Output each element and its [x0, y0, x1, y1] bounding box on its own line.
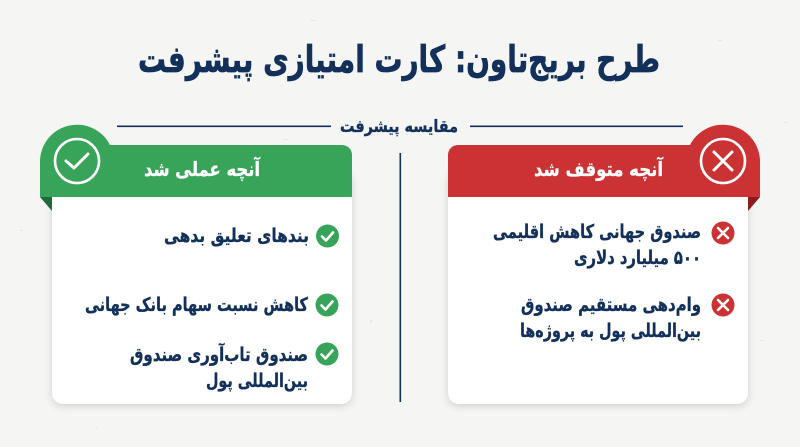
icon: header cross [701, 139, 745, 183]
item 3 [130, 342, 338, 392]
card body [448, 170, 748, 404]
panel: what was halted [448, 125, 760, 404]
panel: what was implemented [40, 125, 352, 404]
item 1: ۵۰۰ میلیارد دلاری [574, 247, 701, 269]
panel heading: آنچه متوقف شد [534, 156, 664, 182]
icon: header check [55, 139, 99, 183]
item 3: بین‌المللی پول [206, 370, 308, 392]
item 2: کاهش نسبت سهام بانک جهانی [85, 294, 309, 316]
red header [448, 125, 760, 197]
item 2 [520, 294, 734, 342]
panel heading: آنچه عملی شد [144, 156, 261, 182]
ribbon fold [40, 197, 52, 211]
item 3: صندوق تاب‌آوری صندوق [130, 342, 308, 366]
green header [40, 125, 352, 197]
center divider [400, 153, 401, 402]
item 1: بندهای تعلیق بدهی [164, 225, 309, 247]
card body [52, 170, 352, 404]
item 2: وام‌دهی مستقیم صندوق [521, 294, 701, 316]
ribbon fold [748, 197, 760, 211]
item 2: بین‌المللی پول به پروژه‌ها [520, 320, 701, 342]
section subtitle with rules: مقایسه پیشرفت [340, 117, 458, 137]
item 1: صندوق جهانی کاهش اقلیمی [493, 221, 701, 243]
item 1 [493, 221, 734, 269]
